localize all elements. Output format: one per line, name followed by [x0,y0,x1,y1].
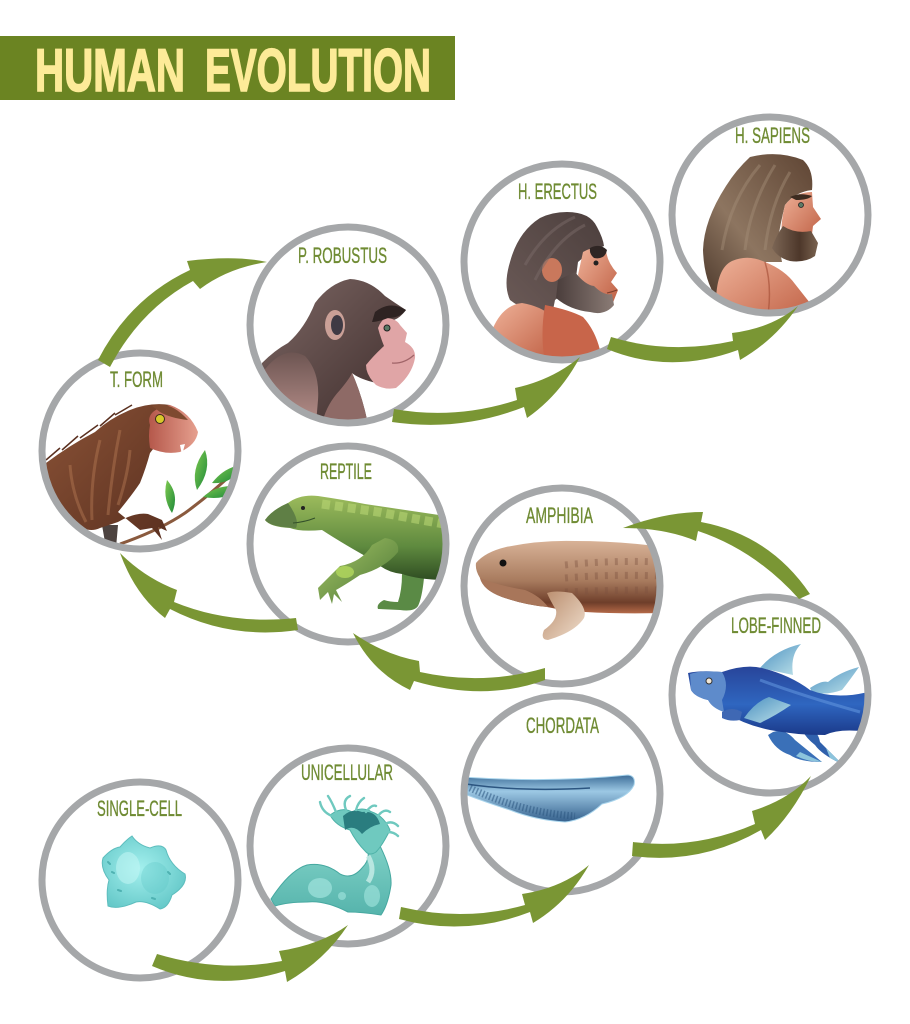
label: P. ROBUSTUS [298,243,387,268]
ring [250,227,446,423]
panel: p. robustus [250,227,446,424]
label: REPTILE [320,459,372,484]
ring [464,164,660,360]
ring [672,117,868,313]
icon: early mammal [46,404,236,548]
icon: unicellular organism [271,796,398,915]
arrow: t. form to p. robustus [98,258,267,367]
ring [464,696,660,892]
ring [672,597,868,793]
title [35,37,431,104]
title: EVOLUTION [205,37,431,104]
icon: reptile [265,496,446,610]
label: SINGLE-CELL [97,796,182,821]
panel: h. erectus [464,164,660,362]
label: AMPHIBIA [526,503,593,528]
arrow: lobe-finned to amphibia [623,512,810,599]
ring [42,782,238,978]
arrow: chordata to lobe-finned [632,776,811,858]
ring [42,353,238,549]
panel: single-cell [42,782,238,978]
panel: lobe-finned [672,597,868,793]
icon: homo erectus head [493,212,618,362]
label: CHORDATA [526,713,599,738]
label: H. ERECTUS [518,179,597,204]
icon: amphibian fish [476,541,662,640]
icon: lobe-finned fish [688,644,868,764]
panel: t. form [42,353,238,549]
title: HUMAN [35,37,185,104]
icon: chordate [462,775,634,822]
icon: single cell [102,836,185,909]
panel: h. sapiens [672,117,868,325]
label: T. FORM [110,367,163,392]
icon: homo sapiens head [703,154,821,325]
ring [250,446,446,642]
arrow: unicellular to chordata [399,865,589,927]
label: LOBE-FINNED [731,613,821,638]
arrow: reptile to t. form [120,553,298,632]
ring [464,488,660,684]
arrow: h. erectus to h. sapiens [607,306,798,362]
panel: amphibia [464,488,662,684]
label: UNICELLULAR [301,760,393,785]
panel: unicellular [250,748,446,944]
panel: chordata [462,696,660,892]
arrow: p. robustus to h. erectus [392,357,580,425]
icon: ape head [262,279,415,424]
label: H. SAPIENS [735,123,810,148]
panel: reptile [250,446,446,642]
arrow: single-cell to unicellular [152,925,348,982]
arrow: amphibia to reptile [353,633,545,691]
ring [250,748,446,944]
title banner [0,36,455,104]
